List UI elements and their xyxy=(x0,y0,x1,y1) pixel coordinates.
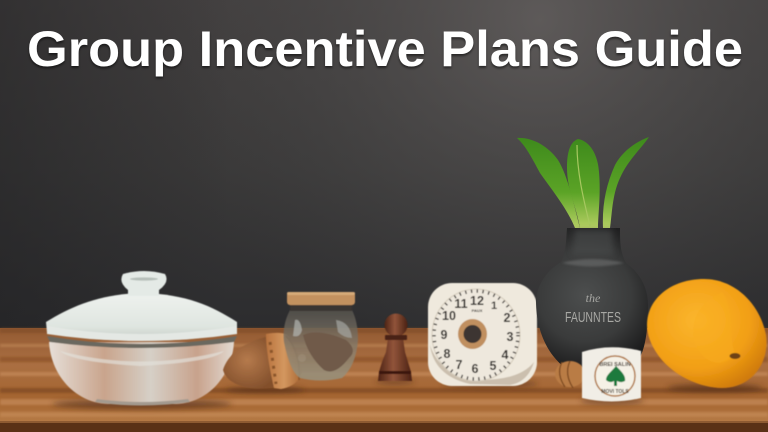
icon: glass jar with cork lid xyxy=(284,292,358,380)
clock numerals: 8 xyxy=(444,347,451,361)
title: Group Incentive Plans Guide xyxy=(27,21,743,77)
clock numerals: 5 xyxy=(490,359,497,373)
clock numerals: 6 xyxy=(472,362,479,376)
clock numerals: 7 xyxy=(456,358,463,372)
title: Group Incentive Plans Guide xyxy=(27,23,743,79)
icon: dark ceramic vase xyxy=(536,228,648,376)
icon: wooden honey dipper xyxy=(555,361,585,388)
clock numerals xyxy=(441,294,514,376)
icon: dark ceramic vase: the xyxy=(586,291,601,305)
clock numerals: 9 xyxy=(441,328,448,342)
background wall xyxy=(0,0,768,332)
clock numerals: 12 xyxy=(470,294,484,308)
icon: orange fruit xyxy=(647,279,767,388)
icon: square white clock xyxy=(428,283,537,386)
icon: wooden acorn xyxy=(223,333,306,389)
clock numerals: 11 xyxy=(454,297,468,311)
icon: plant leaves xyxy=(517,137,649,228)
icon: small white label cup xyxy=(582,347,641,402)
clock numerals: PAUX xyxy=(472,308,483,313)
icon: small white label cup: MOVI TOLS xyxy=(601,389,629,395)
clock numerals: 10 xyxy=(442,309,456,323)
icon: wooden chess pawn xyxy=(378,314,412,381)
wooden table xyxy=(0,328,768,432)
icon: covered ceramic bowl xyxy=(46,271,237,406)
clock numerals: 2 xyxy=(504,311,511,325)
soft object shadows xyxy=(52,380,763,409)
icon: dark ceramic vase: FAUNNTES xyxy=(565,310,621,326)
clock numerals: 1 xyxy=(491,300,497,312)
clock numerals: 3 xyxy=(507,330,514,344)
icon: small white label cup: BREI SALIN xyxy=(599,362,631,368)
clock numerals: 4 xyxy=(502,348,509,362)
